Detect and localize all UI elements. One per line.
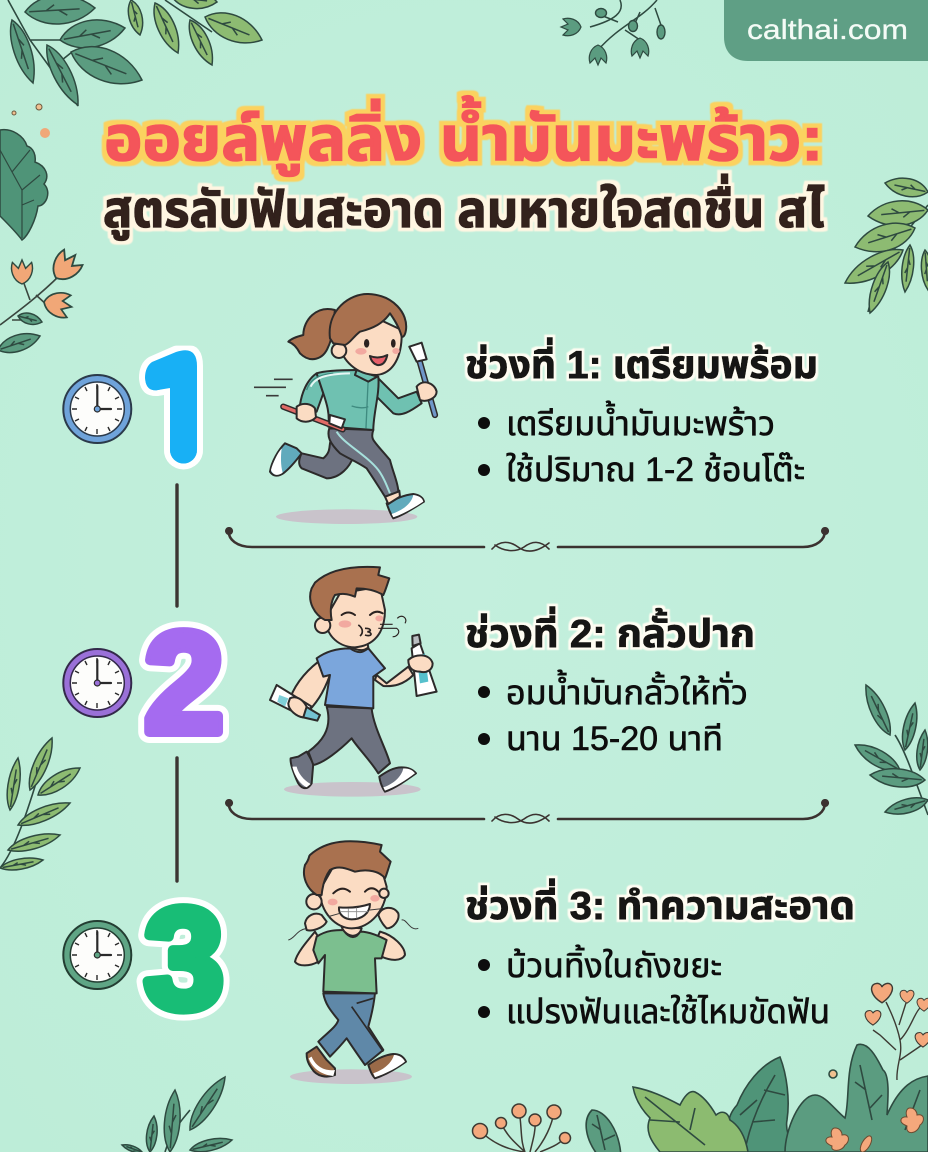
number 1: 1 (133, 338, 219, 497)
step 2 text block: อมน้ำมันกลั้วให้ทั่ว (506, 669, 748, 712)
illustration: boy flossing teeth (288, 841, 418, 1084)
step 1 text block: ช่วงที่ 1: เตรียมพร้อม (465, 337, 818, 387)
step 1 text block: เตรียมน้ำมันมะพร้าว (506, 400, 775, 443)
badge: calthai.com: calthai.com (747, 14, 908, 45)
step 1 text block (465, 337, 818, 489)
clock 2 (63, 649, 131, 717)
number 2: 2 (144, 604, 224, 763)
number 3: 3 (144, 880, 224, 1039)
plant: left oak leaf and dots (0, 104, 50, 240)
plant: bottom-left spray (121, 1073, 233, 1152)
timeline connector lines (175, 485, 179, 881)
step 3 text block: ช่วงที่ 3: ทำความสะอาด (465, 878, 855, 928)
step 3 text block: แปรงฟันและใช้ไหมขัดฟัน (506, 993, 830, 1031)
plant: right top spray (840, 174, 928, 315)
title: ออยล์พูลลิ่ง น้ำมันมะพร้าว: (104, 95, 823, 177)
step 2 text block: ช่วงที่ 2: กลั้วปาก (465, 606, 755, 656)
plant: left orange sprig (0, 247, 85, 357)
step 3 text block (465, 878, 855, 1031)
badge: calthai.com (724, 0, 928, 61)
number 3: 3 (144, 880, 224, 1039)
illustration: boy swishing with toothpaste tubes (270, 567, 437, 797)
illustration: girl running with toothbrushes (254, 294, 437, 524)
number 1: 1 (133, 338, 219, 497)
plant: bottom foliage cluster (586, 983, 928, 1152)
step 3 text block: บ้วนทิ้งในถังขยะ (506, 944, 722, 985)
clock 3 (63, 921, 131, 989)
step 1 text block: ใช้ปริมาณ 1-2 ช้อนโต๊ะ (506, 451, 805, 489)
plant: top-left dark leaves (4, 0, 148, 109)
number 2: 2 (144, 604, 224, 763)
step 2 text block (465, 606, 755, 758)
plant: top-centre small sprig (561, 0, 665, 65)
plant: right middle spray (851, 682, 928, 819)
number 1 (139, 346, 203, 470)
plant: top-left light leaves (125, 0, 267, 68)
plant: bottom berries (472, 1104, 570, 1152)
clock 1 (63, 375, 131, 443)
step 2 text block: นาน 15-20 นาที (506, 720, 723, 758)
divider 2 (227, 801, 827, 823)
plant: left lower spray (0, 735, 84, 873)
divider 1 (227, 529, 827, 551)
subtitle: สูตรลับฟันสะอาด ลมหายใจสดชื่น สไ (103, 174, 824, 241)
